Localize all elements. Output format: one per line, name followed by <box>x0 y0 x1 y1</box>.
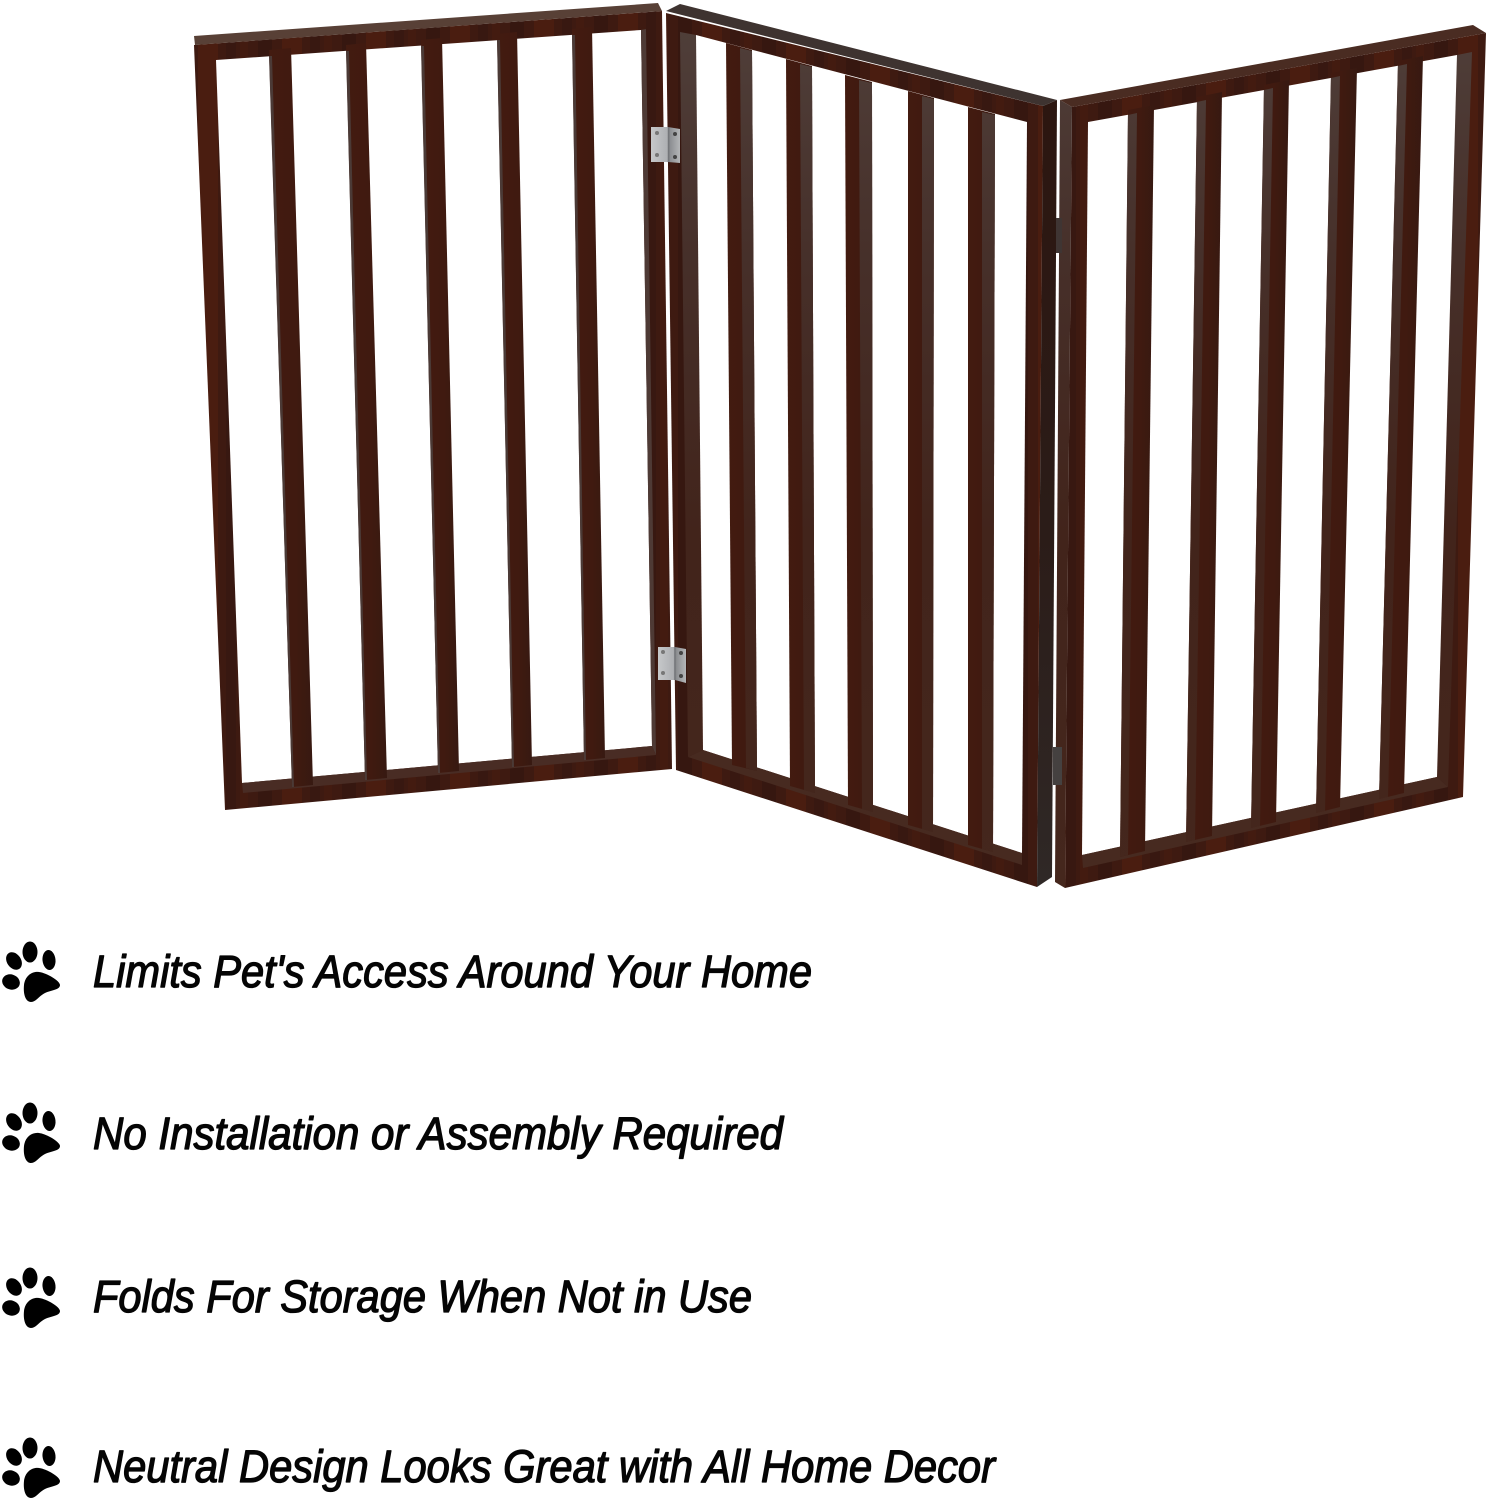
text: no installation: No Installation or Assembly Required <box>93 1108 785 1159</box>
panel: middle gate section <box>666 4 1057 887</box>
middle panel inner side <box>680 32 703 757</box>
panel: left gate section <box>194 3 672 810</box>
right panel inner side <box>1437 52 1472 787</box>
icon: paw print <box>0 1102 60 1163</box>
right panel frame <box>1065 33 1486 888</box>
icon: right upper hinge <box>1056 218 1062 253</box>
feature 1: pet access <box>0 942 812 1002</box>
text: folds for storage: Folds For Storage When Not in Use <box>93 1271 752 1322</box>
feature 4: neutral design <box>0 1438 997 1498</box>
icon: paw print <box>0 942 60 1002</box>
panel: right gate section <box>1055 25 1486 888</box>
middle panel end face <box>1037 100 1057 887</box>
right panel slats <box>1120 56 1423 857</box>
text: neutral design: Neutral Design Looks Great with All Home Decor <box>93 1441 997 1492</box>
icon: right lower hinge <box>1053 747 1062 785</box>
middle panel bottom ledge <box>688 750 1022 865</box>
right panel opening <box>1082 55 1457 855</box>
icon: lower hinge <box>658 647 686 683</box>
middle panel opening <box>696 35 1027 853</box>
left panel slats <box>269 27 605 787</box>
right panel bottom ledge <box>1082 777 1448 868</box>
icon: paw print <box>0 1438 60 1498</box>
right panel end face <box>1055 100 1072 888</box>
left panel opening <box>216 30 652 783</box>
left panel inner side <box>641 29 656 755</box>
left panel frame <box>194 11 672 810</box>
middle panel frame <box>666 13 1043 887</box>
middle panel top face <box>666 4 1057 106</box>
icon: upper hinge <box>651 127 680 163</box>
icon: paw print <box>0 1268 60 1328</box>
middle panel slats <box>726 43 995 852</box>
left panel top face <box>194 3 662 45</box>
left panel bottom ledge <box>242 746 656 793</box>
feature 2: no installation <box>0 1102 785 1163</box>
text: limits access: Limits Pet's Access Around Your Home <box>93 946 812 997</box>
right panel top face <box>1060 25 1486 107</box>
feature 3: folds for storage <box>0 1268 752 1328</box>
